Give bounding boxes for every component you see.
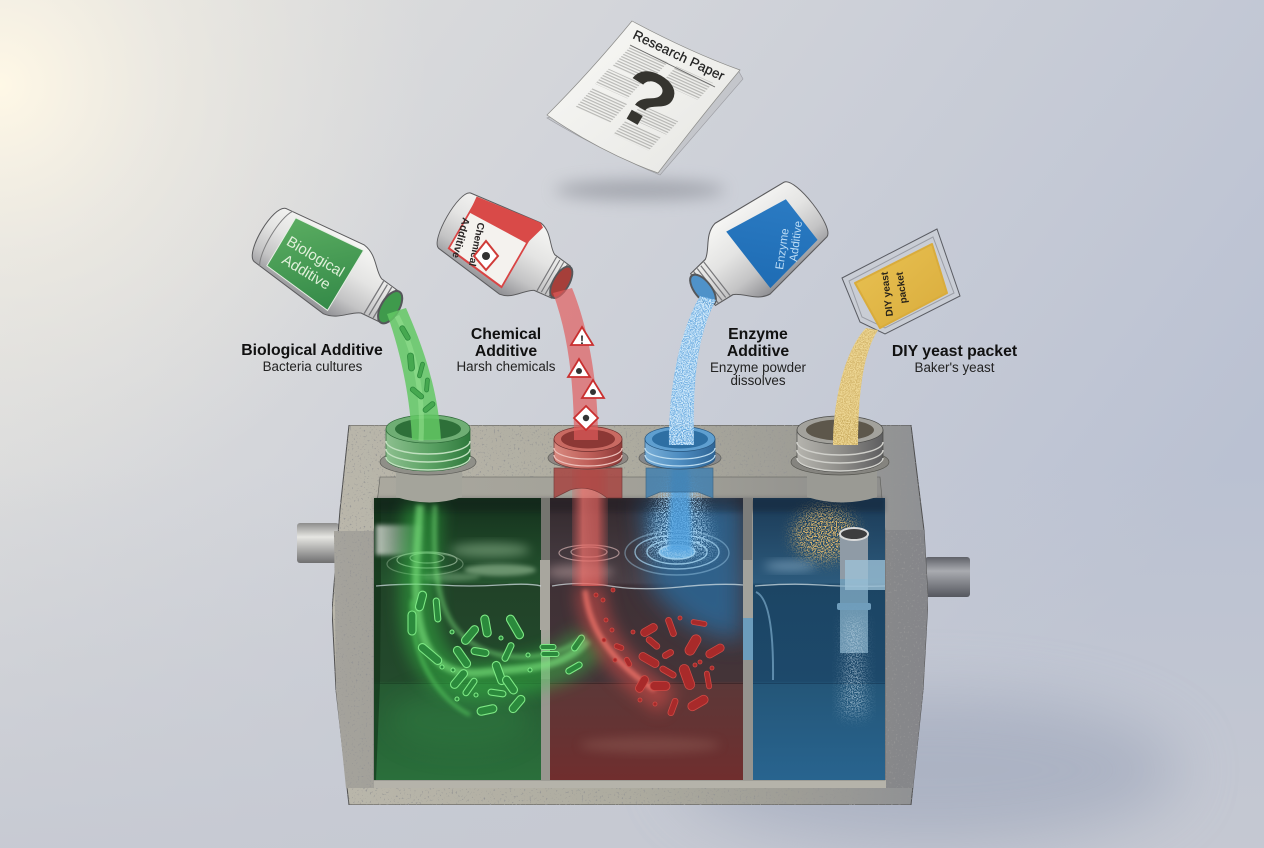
settling particles (842, 620, 866, 715)
packet foil (842, 229, 960, 334)
green pour stream (387, 308, 441, 441)
red pour stream (553, 288, 604, 440)
chamber: green (374, 498, 541, 780)
label: Enzyme Additive: Enzyme powder (710, 360, 807, 375)
green left wall perspective (374, 534, 381, 780)
bottom ledge (374, 780, 886, 788)
research paper with question mark (547, 21, 743, 200)
yeast pour stream (833, 328, 878, 445)
packet gold pouch (855, 244, 947, 328)
blue label (726, 190, 823, 288)
red inlet tube (554, 468, 622, 498)
septic tank (332, 415, 928, 805)
label: Chemical Additive: Chemical (471, 326, 541, 343)
front sheet (547, 21, 740, 173)
blue inlet tube (646, 468, 713, 498)
green port collar (396, 465, 462, 502)
paper text lines (568, 45, 713, 152)
slab shadow on chambers (374, 498, 885, 512)
label: DIY yeast packet: Baker's yeast (915, 360, 995, 375)
paper title: Research Paper (631, 27, 727, 84)
label: Enzyme Additive: Additive (727, 343, 789, 360)
red mouth (546, 263, 577, 301)
blue label text: Enzyme (774, 228, 792, 270)
ripples: green (387, 552, 463, 575)
lower side walls (334, 530, 928, 788)
yeast packet (842, 229, 960, 334)
outlet pipe (925, 557, 970, 597)
green bottle: Biological Additive: Additive (279, 251, 333, 293)
label: Biological Additive: Bacteria cultures (263, 359, 363, 374)
ripples: red (559, 545, 619, 561)
back sheet (547, 70, 743, 175)
green neck threads (364, 281, 397, 321)
red bottle: Chemical Additive: Additive (449, 216, 472, 259)
ripples: blue swirl (625, 531, 729, 575)
divider wall: green and red (540, 498, 550, 780)
blue pour stream (669, 296, 716, 445)
red bottle: Chemical Additive (427, 181, 589, 322)
grey port (791, 416, 889, 475)
green label text: Biological (283, 233, 347, 281)
green label (263, 212, 364, 310)
paper shadow (555, 180, 725, 200)
label: Enzyme Additive: Enzyme (728, 326, 788, 343)
outlet tee pipe (837, 528, 885, 653)
green surface shimmer (450, 543, 530, 557)
hazard icon: exclamation (571, 327, 593, 347)
blue tint from enzyme (640, 498, 743, 640)
label: Biological Additive (241, 342, 383, 374)
tank ground shadow (680, 695, 1180, 845)
label: Chemical Additive: Additive (475, 343, 537, 360)
red label panel (445, 193, 537, 287)
inlet pipe (297, 523, 339, 563)
red neck threads (537, 257, 568, 297)
red surface shimmer (546, 565, 614, 579)
green mouth (373, 287, 407, 327)
red label band (468, 188, 545, 248)
concrete shell (332, 425, 928, 805)
yeast packet: packet (895, 271, 910, 304)
label: DIY yeast packet (892, 343, 1018, 375)
label: Biological Additive: Biological Additive (241, 342, 383, 359)
hazard icon: toxic (582, 380, 604, 398)
hazard icon: corrosive (568, 359, 590, 377)
label: Enzyme Additive (710, 326, 807, 388)
underside of top slab (374, 477, 885, 780)
hazard diamond on label (474, 241, 498, 270)
enzyme powder core (668, 468, 692, 552)
divider wall: red and blue (743, 498, 753, 780)
blue surface shimmer (764, 561, 816, 571)
red bacteria capsules (594, 588, 726, 716)
blue port (639, 426, 721, 469)
red label text: Chemical (466, 221, 486, 267)
grey port collar (807, 465, 877, 502)
hazard icon: exclamation: ! (580, 333, 584, 347)
yeast cloud in water (793, 509, 857, 561)
label: DIY yeast packet: DIY yeast packet (892, 343, 1018, 360)
water surface line (376, 584, 885, 589)
label: Chemical Additive: Harsh chemicals (457, 359, 556, 374)
label: Chemical Additive (457, 326, 556, 374)
red chemical plume (572, 470, 726, 716)
green bottle: Biological Additive (241, 196, 418, 346)
packet text: DIY yeast (880, 270, 896, 317)
blue mouth (685, 270, 721, 309)
green bacteria plume (408, 505, 590, 716)
stream bacteria (399, 325, 436, 413)
green port (380, 415, 476, 475)
blue bottle: Enzyme Additive: Additive (788, 220, 805, 262)
label: Enzyme Additive: dissolves (730, 373, 786, 388)
baffle curve (756, 592, 773, 680)
red port (548, 426, 628, 469)
enzyme powder falling into water (648, 470, 712, 556)
chamber: red (546, 498, 743, 780)
chamber: blue (753, 498, 885, 780)
green bacteria capsules (408, 590, 586, 716)
question mark: ? (602, 48, 693, 151)
paper header rule (630, 45, 715, 87)
blue bottle: Enzyme Additive (669, 169, 840, 330)
inner inlet pipe (376, 525, 424, 555)
blue neck threads (693, 262, 730, 304)
hazard icon: flame diamond (574, 406, 598, 430)
